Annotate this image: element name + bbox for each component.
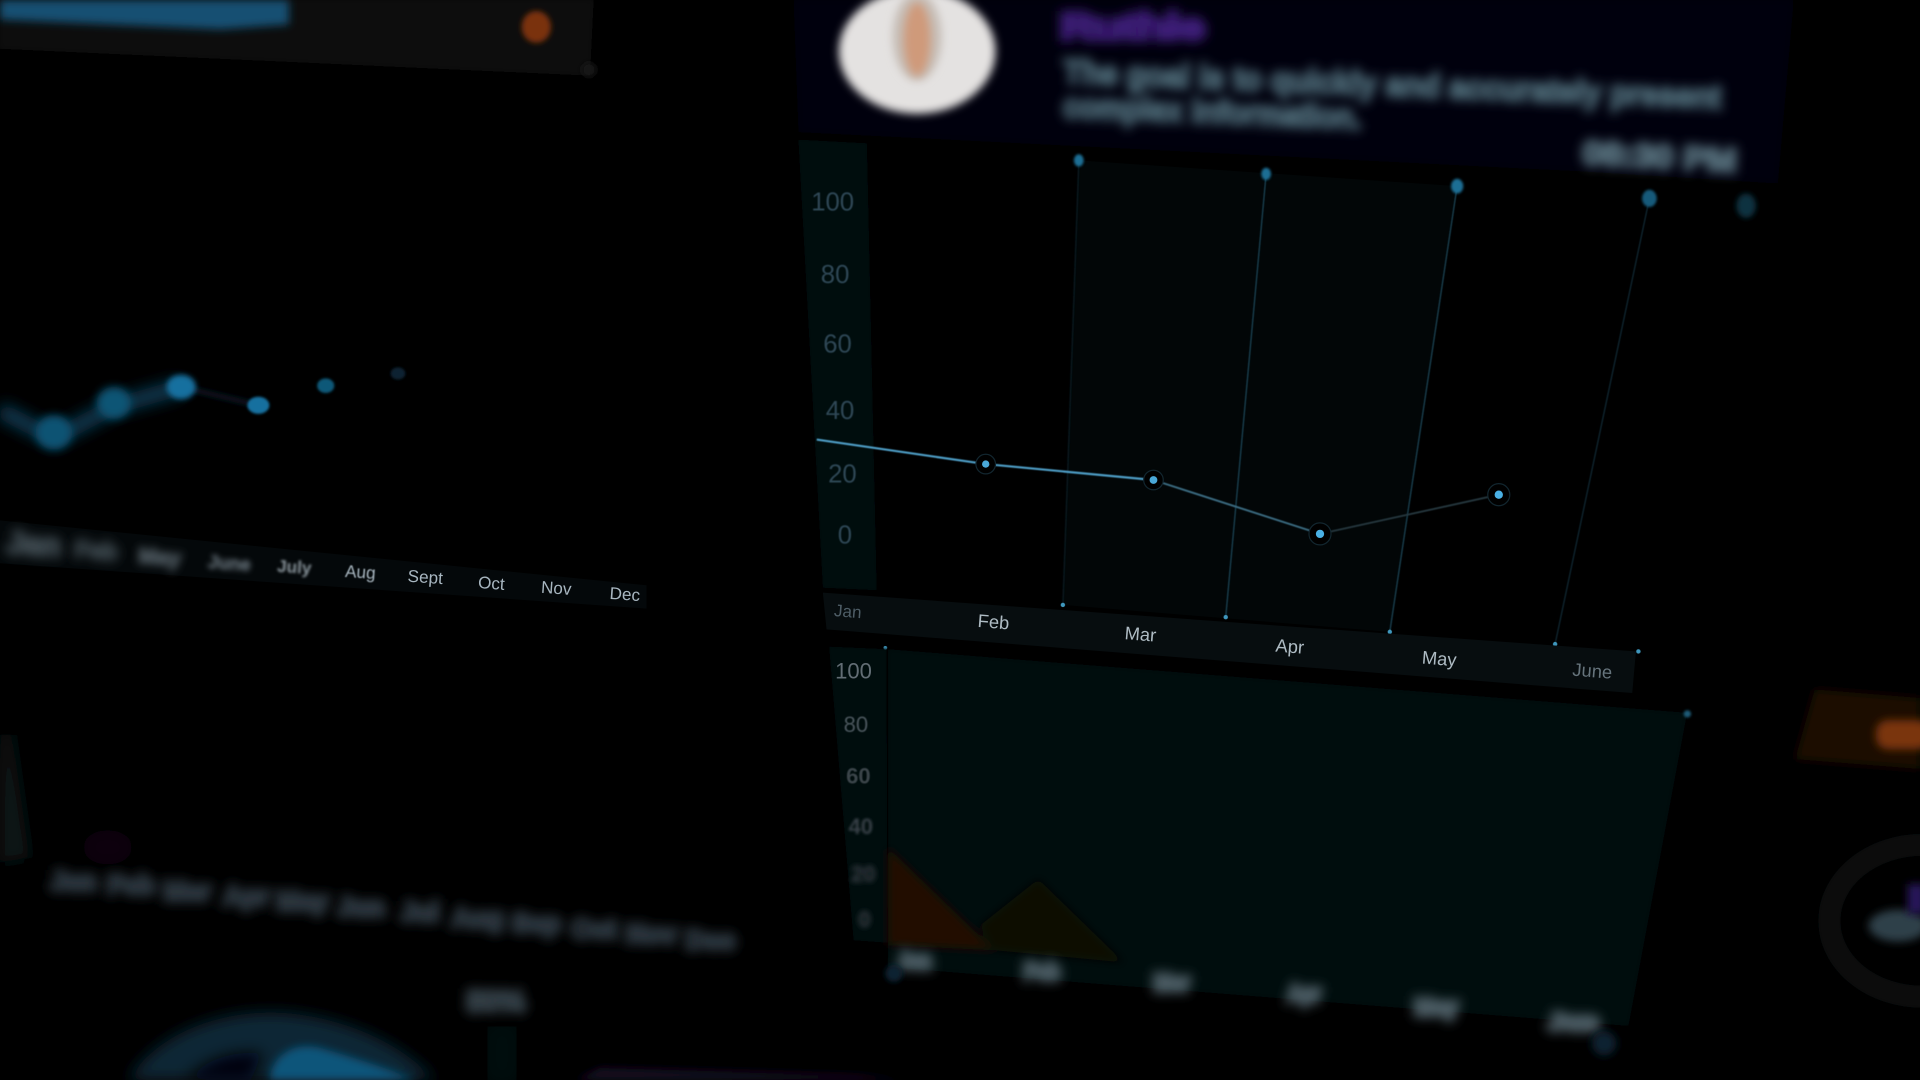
month labels: Feb xyxy=(73,536,119,566)
month labels: Jan xyxy=(5,524,62,564)
panel: lower left blurred month axis: May xyxy=(276,886,329,916)
month axis: June xyxy=(1572,659,1613,683)
blurred month labels xyxy=(898,948,1599,1036)
month axis xyxy=(823,593,1636,693)
blurred month labels: Jun xyxy=(1548,1009,1599,1036)
month axis: Apr xyxy=(1275,635,1305,658)
orange label xyxy=(1876,720,1920,749)
panel: lower left blurred month axis: Aug xyxy=(451,903,504,933)
chart point 4 xyxy=(247,397,269,414)
y axis labels xyxy=(811,189,857,550)
panel: lower left blurred month axis: Mar xyxy=(163,876,212,906)
month axis: Feb xyxy=(977,610,1010,633)
panel: lower left blurred month axis: Dec xyxy=(686,925,735,955)
data point: Apr xyxy=(1309,523,1331,545)
bottom guide markers xyxy=(883,603,1641,654)
panel: lower left blurred month axis: Jul xyxy=(401,897,439,927)
chart point 2 xyxy=(97,387,131,419)
panel: top left header strip xyxy=(0,0,596,77)
month axis: Mar xyxy=(1124,622,1157,646)
gauge label xyxy=(1869,910,1920,942)
month labels: Oct xyxy=(477,572,506,594)
corner blurred markers xyxy=(885,965,902,982)
y axis strip xyxy=(829,647,888,943)
blurred blue title bar xyxy=(0,0,289,29)
icon: grey dot xyxy=(582,62,596,77)
month labels: Sept xyxy=(407,566,444,588)
blurred month labels: Jan xyxy=(898,948,932,975)
panel: bottom left gauge xyxy=(129,985,525,1080)
blurred month labels: Feb xyxy=(1024,959,1060,986)
month labels: May xyxy=(137,543,183,571)
blurred sender name: Ruthie xyxy=(1060,6,1205,47)
month labels xyxy=(5,524,641,605)
panel: lower left blurred month axis: Apr xyxy=(223,881,270,911)
panel: lower area chart xyxy=(829,647,1691,1056)
panel: top left month axis xyxy=(0,520,647,609)
chart point 5 xyxy=(317,378,334,393)
panel: lower left blurred month axis: Nov xyxy=(626,919,677,949)
y axis labels: 60 xyxy=(846,764,871,789)
y axis labels: 0 xyxy=(838,522,852,550)
data point: Feb xyxy=(976,454,996,474)
blurred gauge label: 50% xyxy=(467,985,525,1018)
y axis labels: 100 xyxy=(811,189,854,217)
icon: orange status dot xyxy=(522,11,551,43)
data point: Mar xyxy=(1144,470,1163,490)
y axis labels: 100 xyxy=(835,658,872,683)
panel: bottom purple glow xyxy=(576,1068,906,1080)
panel: right gauge xyxy=(1829,845,1920,997)
month labels: June xyxy=(207,551,252,575)
vertical guide lines xyxy=(1063,160,1649,644)
blurred month labels: Mar xyxy=(1153,970,1191,997)
blurred message text: The goal is to quickly and accurately present xyxy=(1063,53,1722,117)
month axis: Jan xyxy=(833,600,862,622)
shaded chart band xyxy=(1063,160,1457,632)
y axis labels: 80 xyxy=(821,261,849,289)
panel: lower left blurred month axis: Oct xyxy=(571,914,616,944)
corner marker xyxy=(1684,710,1691,718)
avatar xyxy=(839,0,996,114)
panel: lower left blurred month axis: Sep xyxy=(512,908,561,938)
blurred month labels: Apr xyxy=(1287,981,1322,1008)
month labels: Aug xyxy=(345,561,376,583)
blurred month labels: May xyxy=(1414,994,1459,1021)
y axis labels: 0 xyxy=(858,907,871,932)
blurred timestamp: 08:30 PM xyxy=(1582,135,1738,180)
top guide markers xyxy=(1074,154,1756,218)
panel: lower left chart glow xyxy=(0,735,132,864)
chart point 1 xyxy=(36,415,72,449)
y axis labels xyxy=(835,658,876,932)
panel: lower left blurred month axis: Jan xyxy=(50,866,97,896)
y axis labels: 20 xyxy=(828,460,857,488)
data point: May xyxy=(1488,484,1510,506)
panel: right orange button xyxy=(1795,689,1920,769)
y axis labels: 60 xyxy=(823,331,852,359)
panel: lower left blurred month axis xyxy=(50,866,735,955)
gauge highlight arc xyxy=(269,1046,416,1080)
panel: upper line chart xyxy=(798,140,1756,693)
month axis: May xyxy=(1421,647,1458,670)
month labels: July xyxy=(276,556,313,578)
chart point 6 xyxy=(391,367,405,380)
y axis strip xyxy=(798,140,877,590)
month labels: Nov xyxy=(540,577,573,599)
month labels: Dec xyxy=(609,583,641,605)
y axis labels: 40 xyxy=(826,397,854,425)
chart point 3 xyxy=(167,375,196,399)
panel: top left line chart xyxy=(0,367,405,449)
y axis labels: 40 xyxy=(849,814,873,839)
blurred message text: complex information. xyxy=(1063,88,1363,137)
y axis labels: 20 xyxy=(851,862,876,887)
panel: lower left blurred month axis: Feb xyxy=(107,870,155,900)
panel: message header xyxy=(793,0,1794,184)
orange area series xyxy=(888,847,1124,962)
purple segment xyxy=(1908,884,1920,913)
y axis labels: 80 xyxy=(844,712,868,737)
panel: lower left blurred month axis: Jun xyxy=(337,892,385,922)
data line xyxy=(817,440,1499,534)
